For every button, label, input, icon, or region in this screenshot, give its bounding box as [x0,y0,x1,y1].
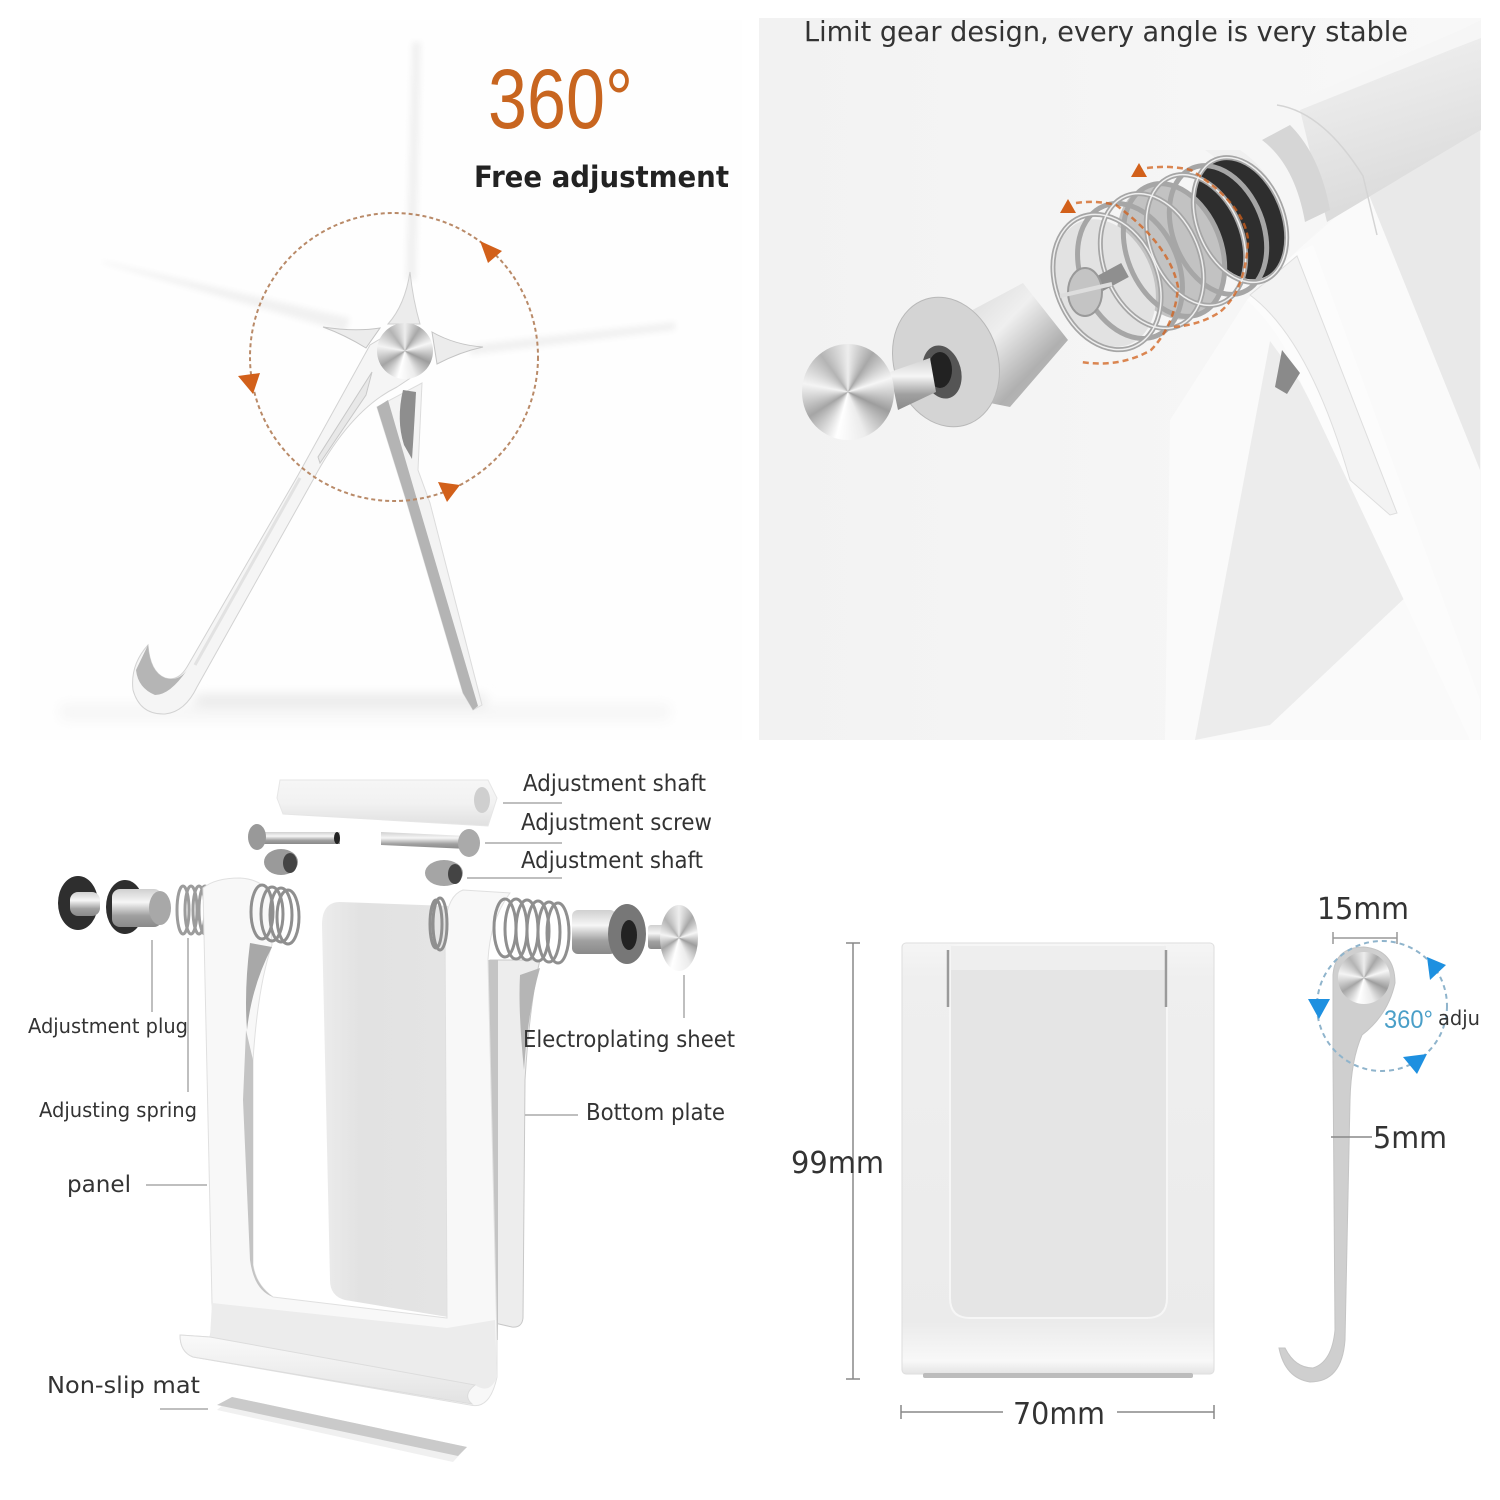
back plate [322,902,448,1317]
knob [377,323,433,379]
part labels: Adjustment plug [28,1014,188,1038]
part labels: Adjustment shaft [523,771,706,797]
part labels: Bottom plate [586,1100,725,1126]
background stand plate [1165,130,1480,740]
upper shaft [1203,20,1481,285]
spikes [388,272,420,324]
adjustment shaft part [277,780,497,826]
non-slip mat [217,1397,467,1462]
pin and cap [802,283,1068,441]
front view of stand [902,943,1214,1378]
leader lines [146,803,684,1409]
front U frame [180,878,510,1406]
part labels: panel [67,1172,131,1198]
rear leg [377,383,482,710]
floor shadow [60,696,670,720]
rotation circle with arrows [238,213,538,502]
front leg and hook [133,330,415,714]
heading: 360 degrees: 360° [488,52,633,146]
spring assembly [1033,143,1304,366]
frame shading and inner leaf [180,943,497,1404]
left hardware [58,876,211,934]
part labels: Adjustment screw [521,810,712,836]
right hardware [572,904,698,971]
panel: 360 degree adjustment [20,20,742,740]
ghost stand positions [100,42,675,355]
caption: Limit gear design, every angle is very stable [804,15,1408,48]
dimension: height 99mm: 99mm [791,1146,884,1181]
part labels: Electroplating sheet [523,1027,735,1053]
stand illustration [133,272,483,714]
dimension: 5mm: 5mm [1373,1121,1447,1156]
part labels: Non-slip mat [47,1373,200,1399]
part labels: Adjusting spring [39,1098,197,1122]
screws and bushes [248,824,480,886]
panel: limit gear design [759,15,1481,740]
rotation indicator [1308,941,1480,1074]
orange rotation arrows [1060,163,1248,364]
rotation indicator: 360° [1384,1006,1433,1034]
rotation indicator: adju [1438,1006,1480,1030]
part labels [28,771,735,1399]
heading: free adjustment: Free adjustment [474,160,729,194]
dimension: 15mm [1317,892,1409,944]
dimension: width 70mm [901,1397,1214,1432]
dimension: height 99mm [791,943,884,1379]
panel: exploded parts diagram [20,760,742,1480]
springs [251,885,569,963]
dimension: width 70mm: 70mm [1013,1397,1105,1432]
dimension: 5mm [1331,1121,1447,1156]
panel: dimensions [760,760,1482,1480]
side view profile [1279,947,1395,1382]
rear leg [488,960,540,1340]
dimension: 15mm: 15mm [1317,892,1409,927]
white leg [1247,245,1480,740]
part labels: Adjustment shaft [521,848,703,874]
